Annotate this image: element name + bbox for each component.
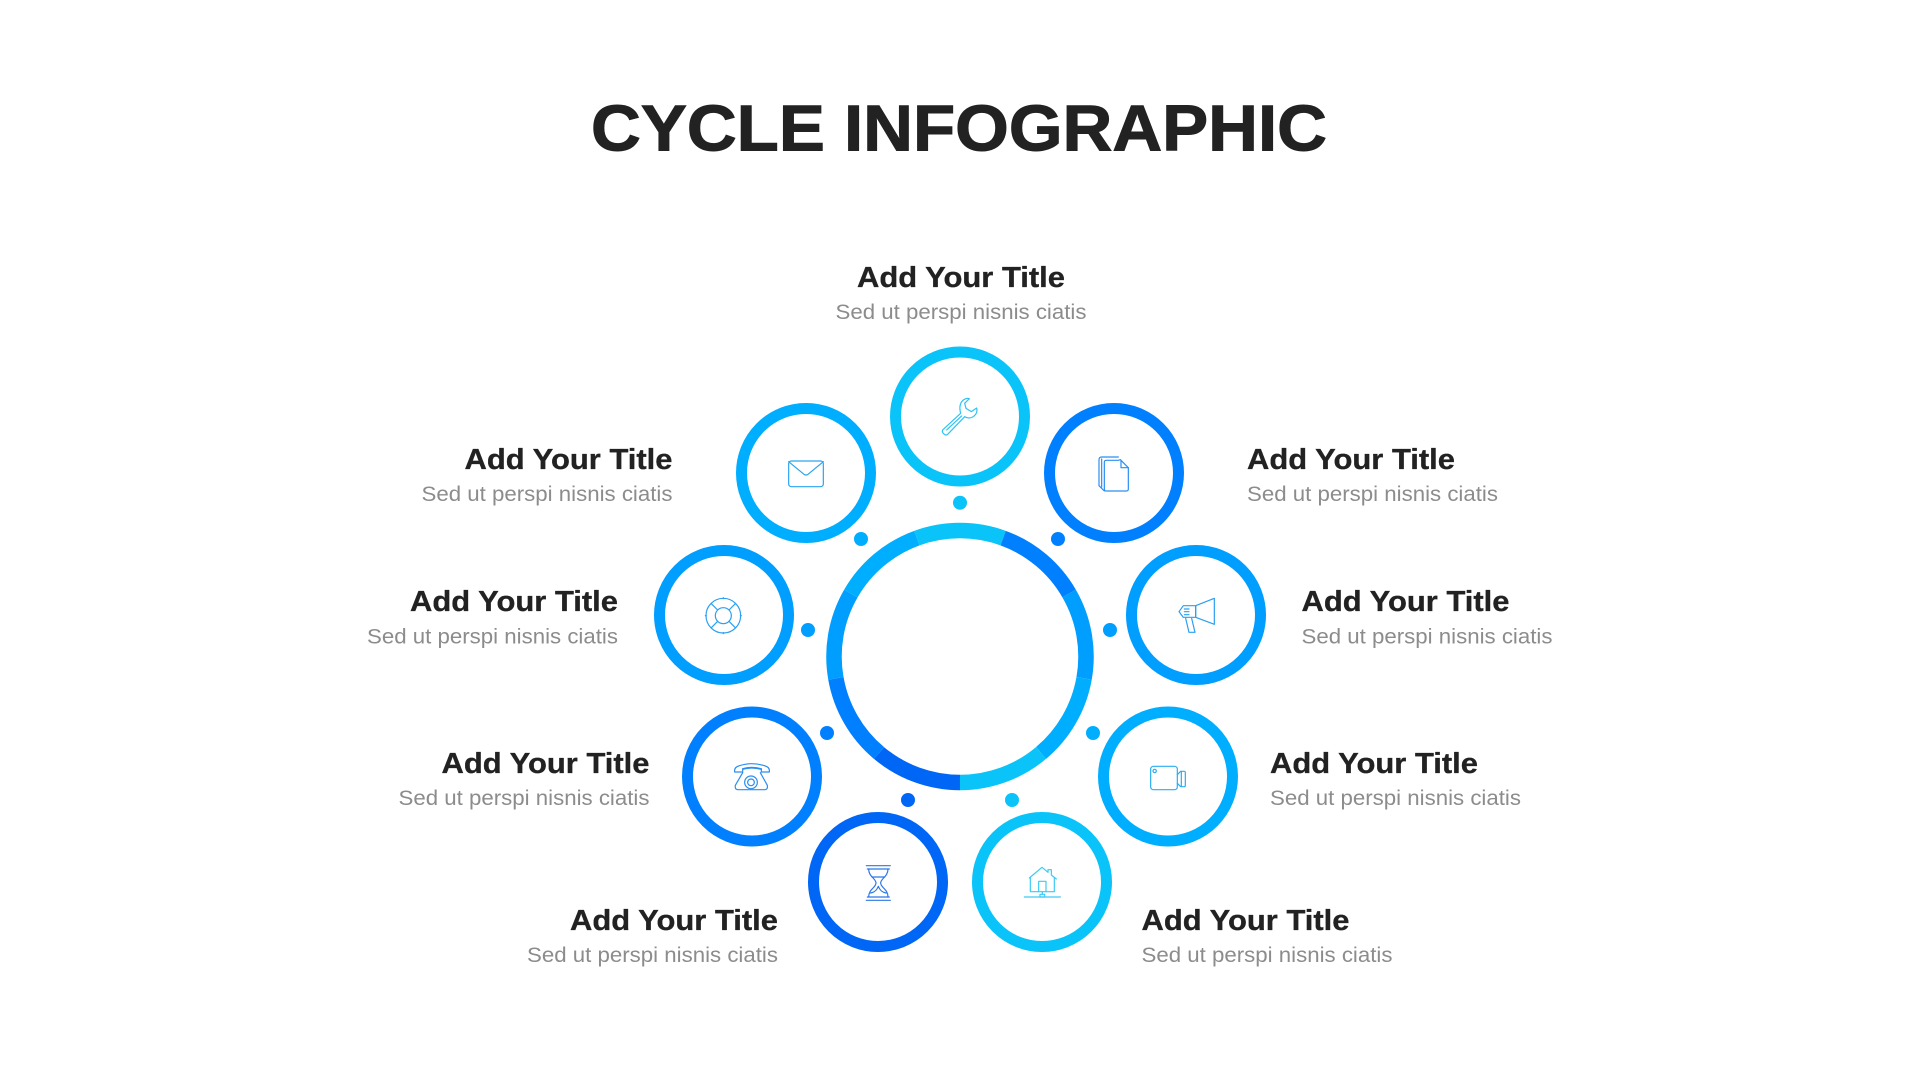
step: camera — [1104, 712, 1232, 841]
label: hourglass: Sed ut perspi nisnis ciatis — [527, 944, 778, 967]
label: mail: Sed ut perspi nisnis ciatis — [422, 483, 672, 506]
step: home — [978, 818, 1106, 946]
label: camera — [1270, 748, 1521, 810]
label: telephone: Sed ut perspi nisnis ciatis — [398, 787, 650, 810]
icon: lifebuoy — [705, 598, 741, 634]
label: telephone — [398, 748, 650, 810]
label: top: Add Your Title — [857, 262, 1065, 294]
icon: hourglass — [866, 866, 890, 900]
label: documents: Add Your Title — [1247, 444, 1455, 476]
step: telephone — [688, 712, 816, 841]
icon: documents — [1099, 457, 1128, 491]
step: mail — [742, 408, 870, 538]
icon: networked house — [1024, 867, 1060, 897]
label: documents: Sed ut perspi nisnis ciatis — [1247, 483, 1498, 506]
central segmented ring — [834, 530, 1086, 782]
icon: video camera — [1151, 766, 1185, 790]
label: lifebuoy: Sed ut perspi nisnis ciatis — [367, 626, 618, 648]
label: telephone: Add Your Title — [442, 748, 650, 780]
icon: telephone — [735, 764, 769, 790]
label: top — [836, 262, 1086, 324]
label: mail: Add Your Title — [464, 444, 672, 476]
label: megaphone — [1302, 586, 1552, 648]
step: hourglass — [814, 818, 942, 946]
label: lifebuoy: Add Your Title — [410, 586, 618, 618]
label: camera: Add Your Title — [1270, 748, 1478, 780]
step: top, wrench — [896, 352, 1024, 481]
label: lifebuoy — [367, 586, 618, 648]
label: home — [1142, 905, 1392, 967]
label: hourglass: Add Your Title — [570, 905, 778, 937]
label: documents — [1247, 444, 1498, 506]
label: megaphone: Add Your Title — [1302, 586, 1510, 618]
step: lifebuoy — [660, 550, 788, 680]
label: home: Sed ut perspi nisnis ciatis — [1142, 944, 1392, 967]
connector dots — [801, 496, 1117, 807]
label: home: Add Your Title — [1142, 905, 1350, 937]
main title: CYCLE INFOGRAPHIC — [591, 92, 1327, 164]
step: megaphone — [1132, 550, 1260, 680]
label: top: Sed ut perspi nisnis ciatis — [836, 301, 1086, 324]
label: camera: Sed ut perspi nisnis ciatis — [1270, 787, 1521, 810]
icon: megaphone — [1179, 598, 1214, 632]
icon: envelope — [789, 461, 823, 487]
step: documents — [1050, 408, 1178, 538]
label: mail — [422, 444, 672, 506]
icon: wrench — [942, 398, 977, 435]
label: megaphone: Sed ut perspi nisnis ciatis — [1302, 626, 1552, 648]
label: hourglass — [527, 905, 778, 967]
